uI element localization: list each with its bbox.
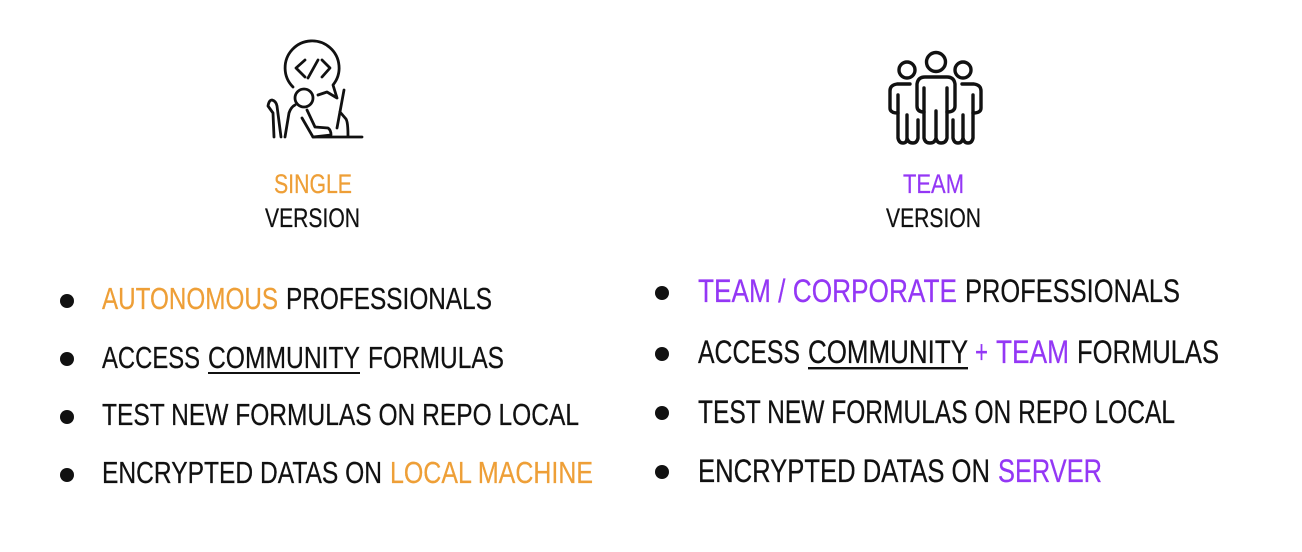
bullet item: team corporate professionals: PROFESSIONALS	[965, 273, 1180, 309]
bullet item: access community formulas: ACCESS	[102, 340, 200, 375]
bullet item: test new formulas: TEST NEW FORMULAS ON REPO LOCAL	[102, 397, 579, 432]
heading: single version: SINGLE	[274, 169, 352, 199]
list: single version features	[60, 281, 593, 490]
bullet item: access community formulas: FORMULAS	[368, 340, 504, 375]
heading: single version: VERSION	[265, 203, 360, 233]
bullet item: team corporate professionals	[655, 273, 1180, 309]
bullet item: encrypted datas on server: SERVER	[998, 453, 1102, 489]
bullet item: autonomous professionals	[60, 281, 492, 316]
bullet item: access community and team formulas: COMMUNITY	[808, 334, 968, 370]
bullet item: access community formulas	[60, 340, 504, 375]
bullet item: encrypted datas on local machine	[60, 455, 593, 490]
panel: team version	[655, 52, 1219, 489]
heading: team version: VERSION	[886, 203, 981, 233]
icon: group of three people	[890, 52, 981, 143]
bullet item: access community and team formulas	[655, 334, 1219, 370]
bullet item: test new formulas: TEST NEW FORMULAS ON REPO LOCAL	[698, 394, 1175, 430]
panel: single version	[60, 41, 593, 490]
icon: developer at desk with code speech bubble	[268, 41, 362, 137]
bullet item: access community and team formulas: TEAM	[996, 334, 1069, 370]
bullet item: encrypted datas on local machine: ENCRYPTED DATAS ON	[102, 455, 382, 490]
bullet item: access community and team formulas: FORMULAS	[1077, 334, 1219, 370]
bullet item: access community formulas: COMMUNITY	[208, 340, 360, 375]
bullet item: autonomous professionals: AUTONOMOUS	[102, 281, 278, 316]
bullet item: encrypted datas on local machine: LOCAL MACHINE	[390, 455, 593, 490]
bullet item: encrypted datas on server: ENCRYPTED DATAS ON	[698, 453, 990, 489]
heading: team version: TEAM	[903, 169, 964, 199]
bullet item: autonomous professionals: PROFESSIONALS	[286, 281, 492, 316]
bullet item: access community and team formulas: +	[975, 334, 988, 370]
list: team version features	[655, 273, 1219, 489]
bullet item: team corporate professionals: TEAM / CORPORATE	[698, 273, 957, 309]
heading: single version	[265, 169, 360, 233]
heading: team version	[886, 169, 981, 233]
bullet item: access community and team formulas: ACCESS	[698, 334, 800, 370]
